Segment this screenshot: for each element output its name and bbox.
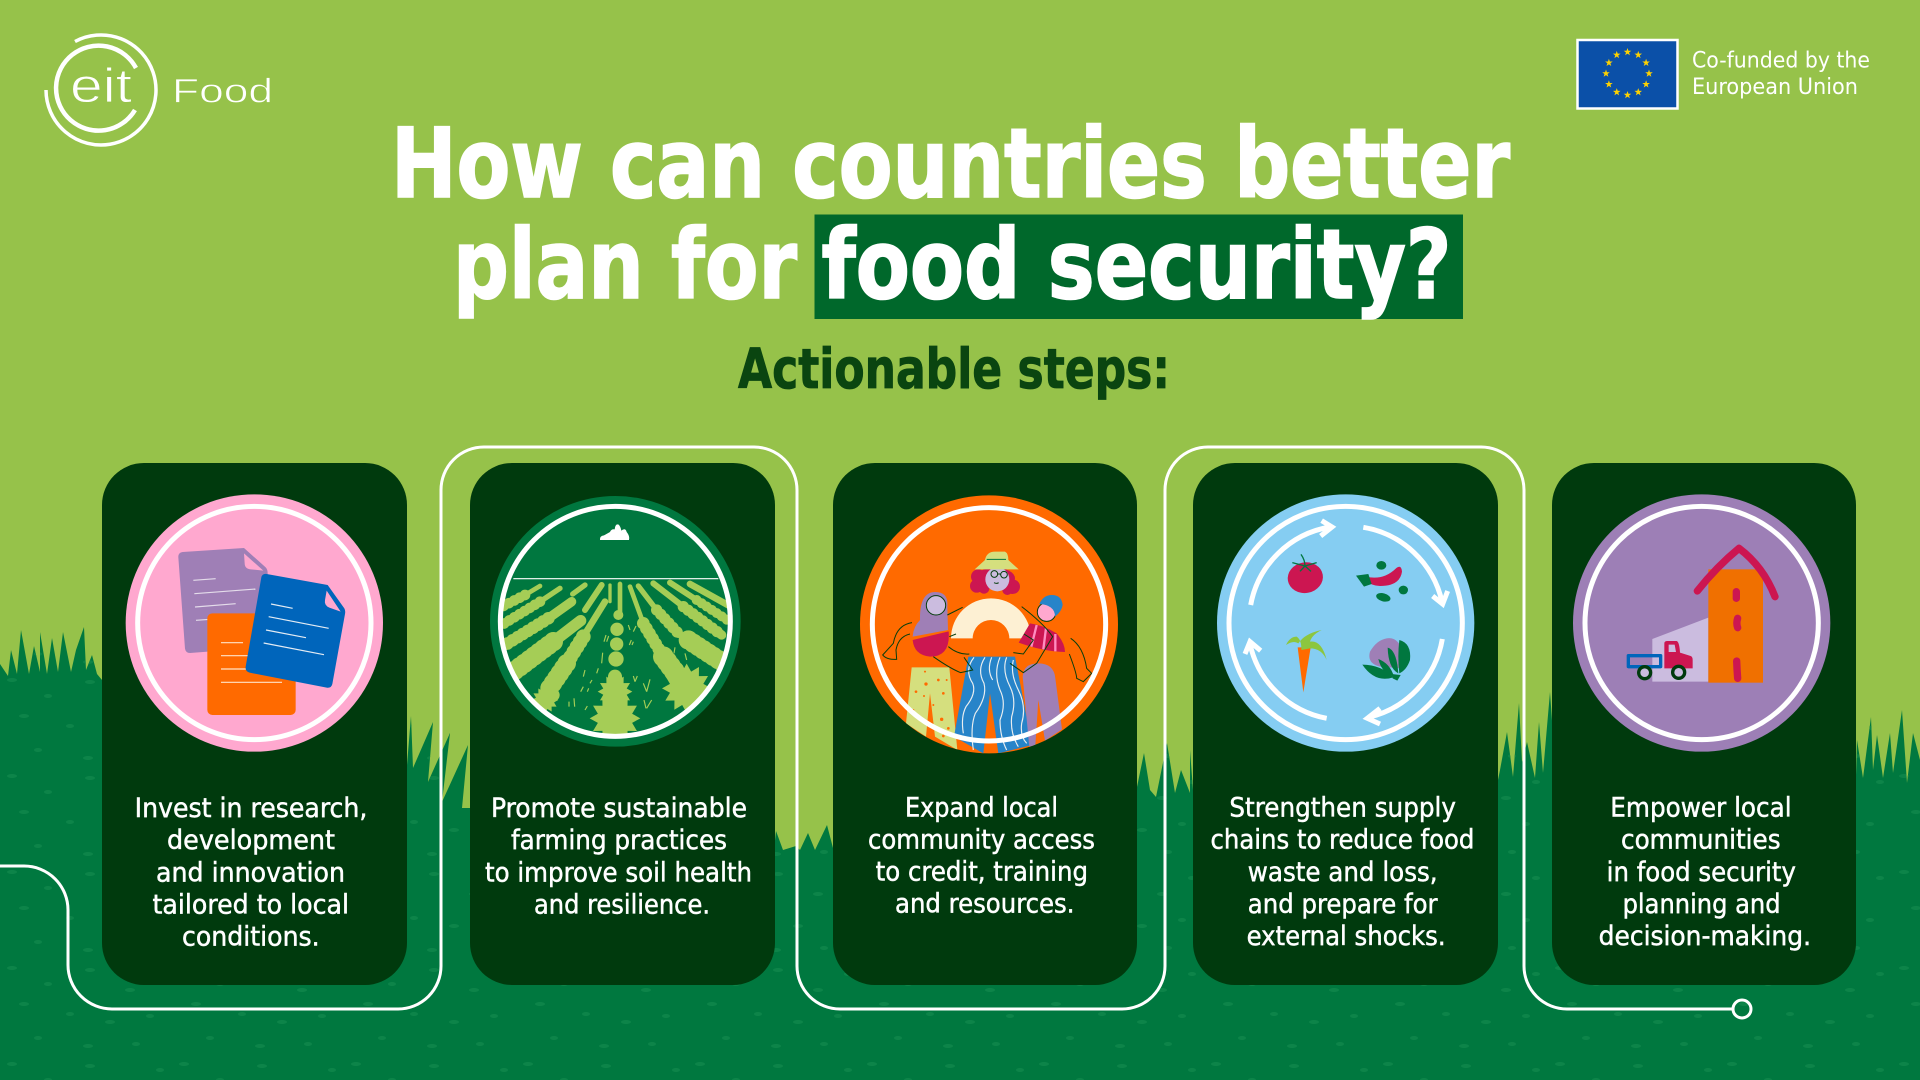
- card 3: community access: [833, 463, 1137, 985]
- text: step 5: planning and: [1623, 889, 1781, 920]
- text: step 3: [868, 792, 1095, 920]
- icon: circular produce supply chain: [1217, 494, 1474, 752]
- title: How can countries better: [391, 108, 1510, 220]
- text: step 1: conditions.: [182, 922, 320, 952]
- text: step 1: tailored to local: [152, 890, 349, 920]
- text: step 4: external shocks.: [1247, 921, 1446, 952]
- logo: EIT Food: [46, 35, 273, 145]
- text: step 2: [485, 793, 752, 920]
- title: plan for: [453, 209, 797, 321]
- text: step 4: and prepare for: [1248, 889, 1438, 920]
- EU flag: [1578, 40, 1678, 108]
- card 5: empower communities: [1552, 463, 1856, 985]
- title: [391, 108, 1510, 321]
- text: step 1: and innovation: [156, 858, 345, 888]
- text: step 5: [1599, 792, 1811, 952]
- text: step 5: decision-making.: [1599, 921, 1811, 952]
- subtitle: Actionable steps:: [738, 337, 1170, 401]
- text: step 1: [135, 793, 367, 952]
- text: step 5: in food security: [1607, 857, 1796, 888]
- icon: truck and road: [1573, 494, 1830, 752]
- text: step 1: development: [167, 825, 335, 856]
- text: step 3: community access: [868, 824, 1095, 856]
- card 4: supply chains: [1193, 463, 1498, 985]
- text: step 1: Invest in research,: [135, 793, 367, 824]
- text: step 4: chains to reduce food: [1210, 824, 1474, 856]
- text: step 4: [1210, 792, 1474, 952]
- grass ground: [0, 627, 1920, 1080]
- icon: crop field: [490, 496, 741, 747]
- EU co-funded badge: Co-funded by the: [1692, 48, 1870, 74]
- connector line: [0, 447, 1751, 1018]
- text: step 3: to credit, training: [876, 856, 1088, 888]
- text: step 5: Empower local: [1610, 792, 1792, 824]
- icon: three people: [860, 495, 1118, 753]
- logo: EIT Food: eit: [70, 60, 132, 113]
- text: step 2: Promote sustainable: [491, 793, 747, 824]
- text: step 2: farming practices: [511, 825, 727, 856]
- text: step 5: communities: [1621, 824, 1781, 856]
- text: step 2: to improve soil health: [485, 858, 752, 888]
- title highlight: food security?: [822, 209, 1452, 321]
- EU co-funded badge: European Union: [1692, 75, 1858, 100]
- icon: documents: [126, 494, 383, 752]
- EU co-funded badge: [1578, 40, 1870, 108]
- text: step 4: Strengthen supply: [1229, 792, 1456, 824]
- card 1: research: [102, 463, 407, 985]
- text: step 2: and resilience.: [534, 890, 710, 920]
- card 2: sustainable farming: [470, 463, 775, 985]
- logo: EIT Food: Food: [172, 72, 273, 110]
- text: step 3: and resources.: [895, 888, 1074, 920]
- text: step 3: Expand local: [905, 792, 1058, 824]
- text: step 4: waste and loss,: [1248, 857, 1438, 888]
